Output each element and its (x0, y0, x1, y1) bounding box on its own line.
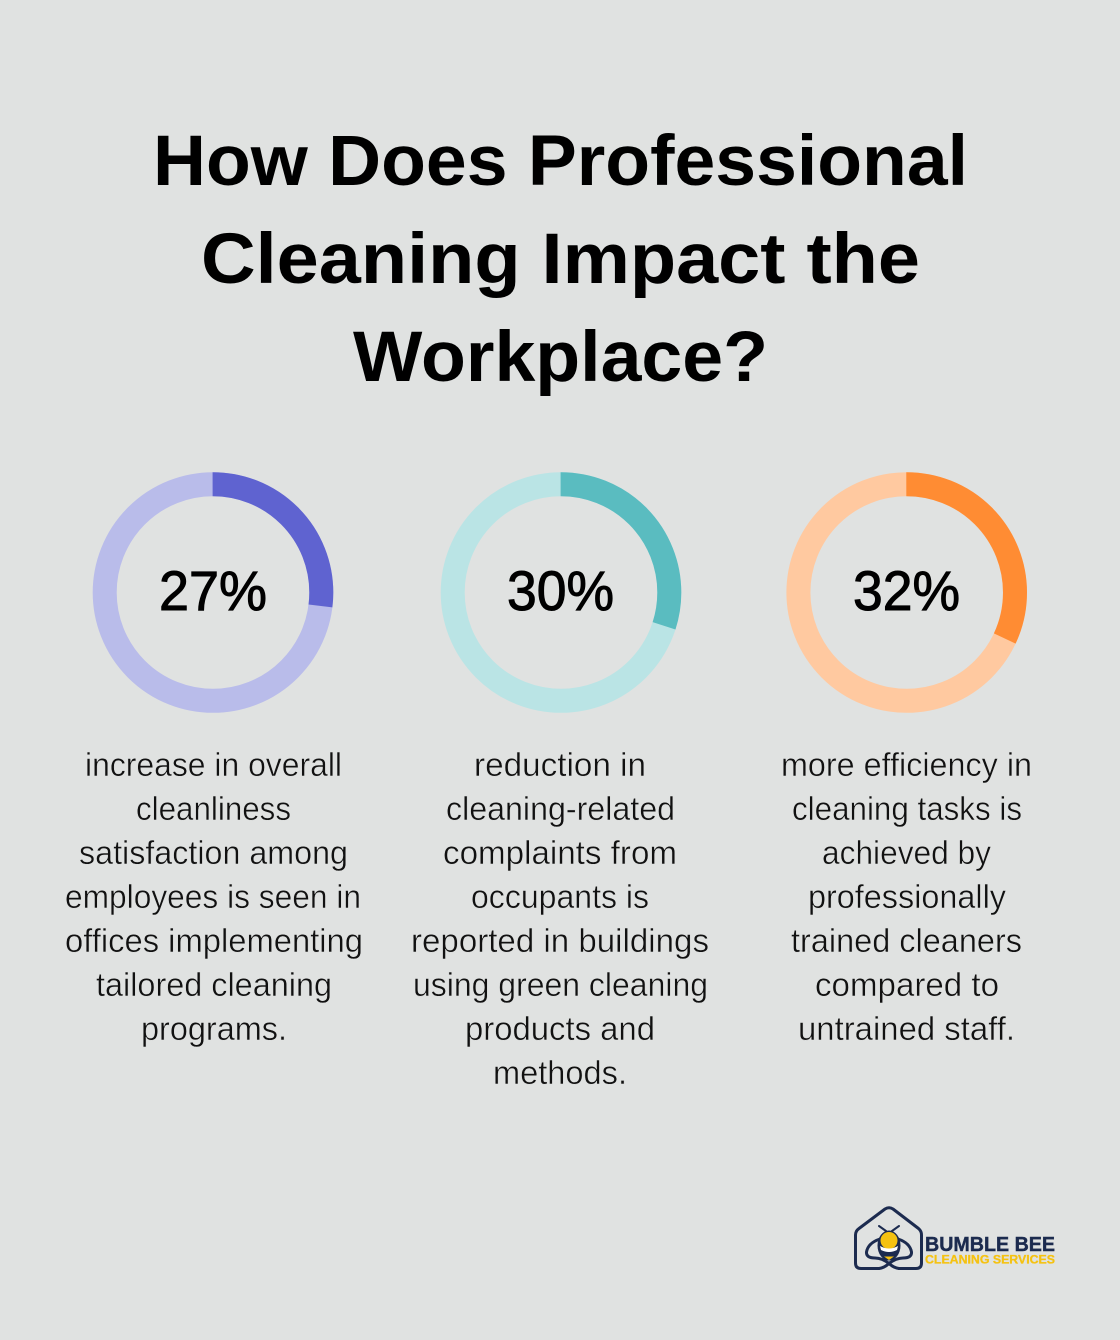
donut chart: 27% (105, 484, 321, 701)
panel: 27% statistic (65, 484, 363, 1047)
title: How Does Professional (153, 122, 968, 201)
logo: Bumble Bee Cleaning Services (856, 1208, 1055, 1268)
description: cleanliness satisfaction: tailored cleaning (96, 966, 332, 1003)
description: complaint reduction (411, 746, 709, 1091)
brand tagline: CLEANING SERVICES (925, 1252, 1055, 1266)
icon: bee in house (856, 1208, 922, 1268)
description: cleaning efficiency: cleaning tasks is (792, 790, 1022, 827)
description: cleaning efficiency (781, 746, 1032, 1047)
description: complaint reduction: using green cleaning (413, 966, 708, 1003)
description: cleanliness satisfaction (65, 746, 363, 1047)
description: cleanliness satisfaction: satisfaction among (79, 834, 348, 871)
panel: 32% statistic (781, 484, 1032, 1047)
description: complaint reduction: occupants is (471, 878, 649, 915)
description: cleaning efficiency: professionally (808, 878, 1006, 915)
value: 27%: 27% (159, 559, 267, 622)
description: cleanliness satisfaction: employees is seen in (65, 878, 361, 915)
description: cleaning efficiency: untrained staff. (798, 1010, 1015, 1047)
value: 32%: 32% (853, 559, 960, 622)
donut chart: 30% (453, 484, 669, 701)
title: Workplace? (353, 318, 768, 397)
title (153, 122, 968, 397)
description: cleanliness satisfaction: programs. (141, 1010, 287, 1047)
description: cleanliness satisfaction: offices implementing (65, 922, 363, 959)
value: 30%: 30% (507, 559, 614, 622)
description: complaint reduction: cleaning-related (446, 790, 675, 827)
panel: 30% statistic (411, 484, 709, 1091)
donut chart: 32% (798, 484, 1015, 701)
description: cleanliness satisfaction: increase in overall (85, 746, 342, 783)
brand name: BUMBLE BEE (925, 1234, 1055, 1256)
description: cleanliness satisfaction: cleanliness (136, 790, 291, 827)
description: complaint reduction: reduction in (474, 746, 646, 783)
description: complaint reduction: reported in buildings (411, 922, 709, 959)
description: complaint reduction: complaints from (443, 834, 677, 871)
description: cleaning efficiency: more efficiency in (781, 746, 1032, 783)
description: cleaning efficiency: trained cleaners (791, 922, 1022, 959)
description: complaint reduction: products and (465, 1010, 655, 1047)
description: complaint reduction: methods. (493, 1054, 627, 1091)
description: cleaning efficiency: achieved by (822, 834, 991, 871)
title: Cleaning Impact the (201, 220, 920, 299)
description: cleaning efficiency: compared to (815, 966, 999, 1003)
